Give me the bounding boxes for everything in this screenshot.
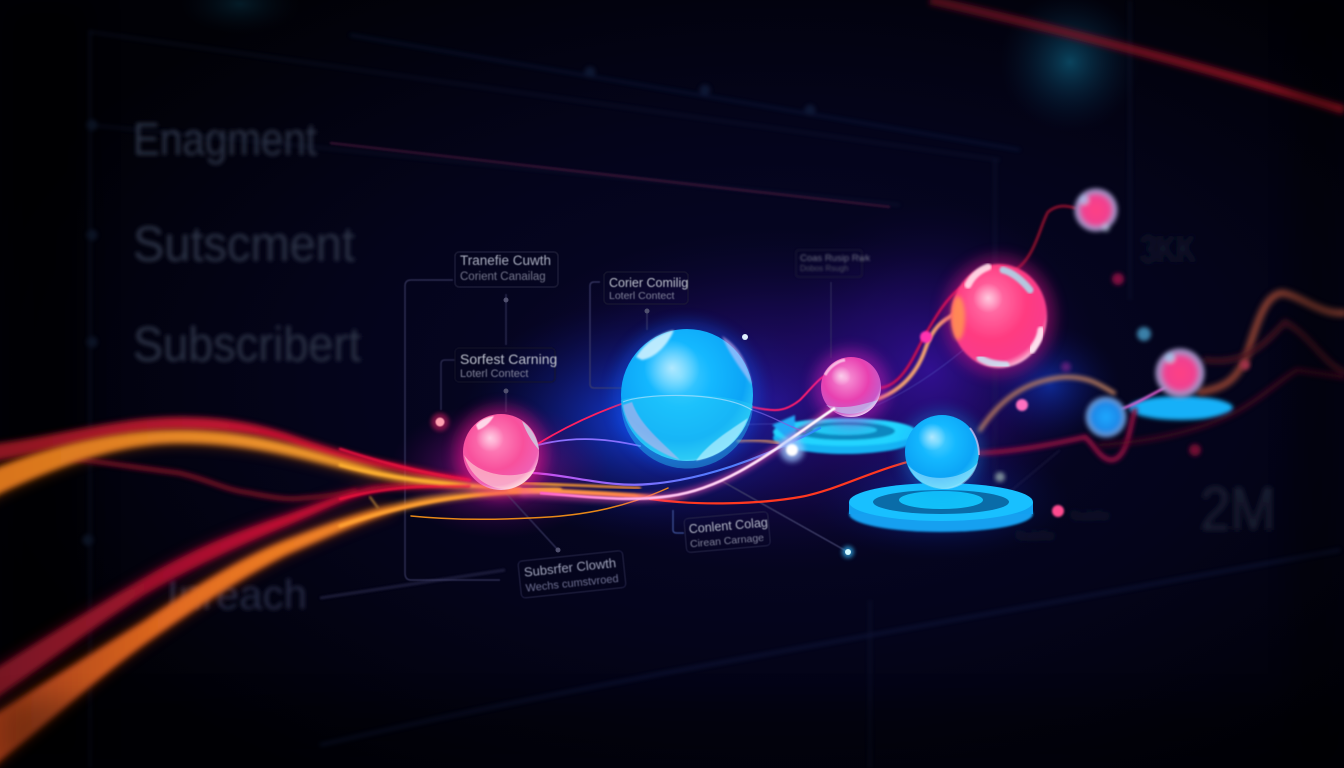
heading: reach: Inreach — [167, 571, 307, 618]
label: Corier Comilig: Loterl Contect — [609, 290, 674, 302]
label: Sorfest Carning — [455, 348, 557, 382]
label: Subsrfer Clowth — [518, 550, 626, 598]
stream: bright cores — [340, 449, 560, 526]
sphere: magenta small — [813, 349, 889, 425]
right blurred values: 3KK — [1140, 229, 1196, 271]
label: faded card: Coas Rusip Rwk — [800, 253, 870, 264]
streams: centre threads — [370, 372, 935, 519]
right blurred values — [1015, 229, 1276, 544]
stream: upper red ribbon — [0, 417, 470, 482]
label: Content Colag: Cirean Carnage — [690, 532, 765, 550]
platform: back — [772, 415, 917, 454]
heading: Subscribert: Subscribert — [133, 318, 361, 372]
label: Content Colag: Conlent Colag — [688, 516, 768, 536]
sphere: far pink, blurred — [1155, 348, 1205, 398]
label: Tranefie Cuwth: Corient Canailag — [460, 271, 546, 283]
label: Corier Comilig: Corier Comilig — [609, 276, 688, 290]
platform: right far — [1129, 396, 1233, 420]
stream: lower orange ribbon — [0, 488, 560, 768]
heading: Sutscment: Sutscment — [133, 216, 355, 272]
connector lines — [320, 280, 1060, 598]
stream highlight: white flare — [520, 408, 835, 499]
top right red streak — [930, 0, 1344, 110]
sphere: big pink — [943, 256, 1055, 376]
sphere: far blue, blurred — [1085, 396, 1127, 438]
right blurred values: Subtle — [1015, 527, 1055, 543]
nodes: small glowing dots — [431, 273, 1250, 558]
stream: left fan — [0, 417, 560, 768]
label: Sorfest Carning: Loterl Contect — [460, 368, 528, 380]
sphere: blue on platform — [900, 410, 984, 494]
heading: Enagment: Enagment — [133, 113, 317, 165]
label: faded card — [796, 250, 870, 277]
stream: lower red ribbon — [0, 483, 460, 715]
sphere: large blue — [613, 321, 761, 469]
right blurred values: 2M — [1200, 475, 1276, 544]
label: Sorfest Carning: Sorfest Carning — [460, 351, 557, 367]
label: Tranefie Cuwth — [455, 252, 558, 287]
stream: upper orange ribbon — [0, 430, 520, 510]
stream glow — [0, 430, 429, 768]
label: Corier Comilig — [604, 272, 688, 304]
label: faded card: Dobos Rsugh — [800, 264, 848, 273]
label: Subsrfer Clowth: Subsrfer Clowth — [523, 555, 617, 580]
streams: right rising — [868, 206, 1344, 460]
label: Content Colag — [684, 511, 770, 553]
sphere: pink left — [455, 406, 547, 498]
heading underline — [330, 143, 890, 207]
platform: front — [849, 483, 1033, 532]
platforms — [772, 396, 1233, 532]
stream: thin dark red — [50, 455, 357, 499]
label: Subsrfer Clowth: Wechs cumstvroed — [525, 573, 619, 595]
label: Tranefie Cuwth: Tranefie Cuwth — [460, 253, 551, 268]
sphere: top pink, blurred — [1074, 188, 1118, 232]
right blurred values: Subtle — [1070, 507, 1110, 523]
